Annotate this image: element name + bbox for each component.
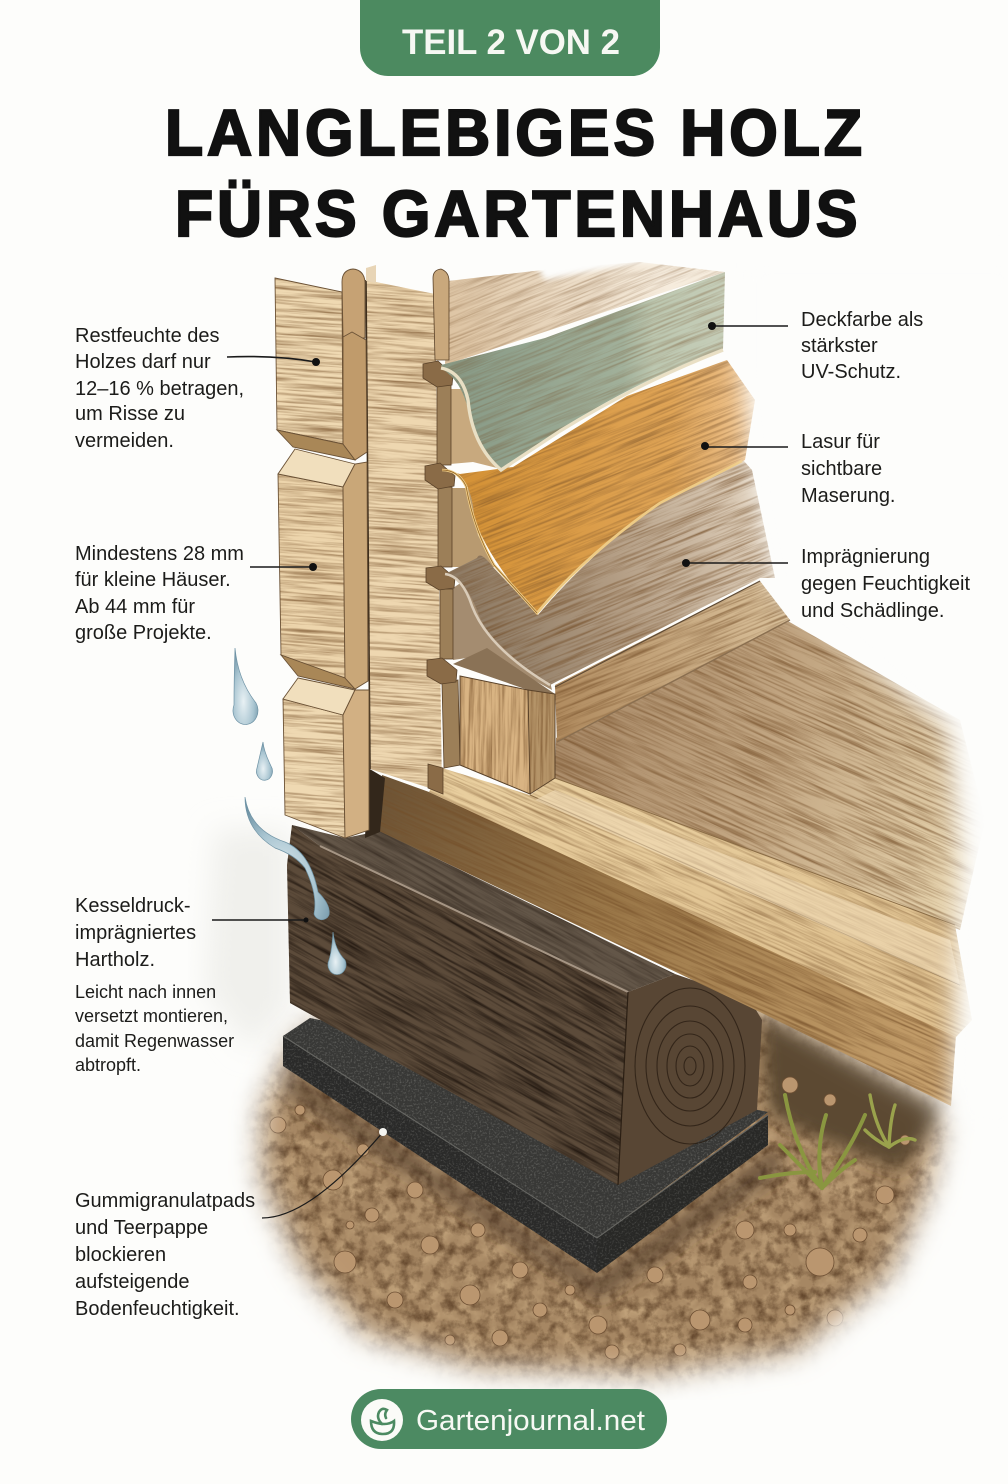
water drops and runoff xyxy=(233,648,346,975)
ground with soil and pebbles xyxy=(239,1010,960,1396)
callout: pressure-treated hardwood: abtropft. xyxy=(75,1055,141,1075)
title: FÜRS GARTENHAUS xyxy=(175,177,858,250)
lower brown rim beam xyxy=(379,775,956,1106)
callout: rubber granulate pads xyxy=(75,1128,387,1320)
callout: residual moisture xyxy=(75,325,320,452)
illustration: wall construction cross-section xyxy=(190,240,1008,1400)
callout: glaze: Lasur für xyxy=(801,431,880,453)
callout: rubber granulate pads: Gummigranulatpads xyxy=(75,1190,255,1212)
plant tufts xyxy=(760,1095,915,1188)
soft grey wash beside sleeper xyxy=(205,830,290,1050)
rubber granulate pad with roofing felt xyxy=(283,1018,768,1273)
callout: pressure-treated hardwood: damit Regenwasser xyxy=(75,1031,234,1051)
callout: impregnation: Imprägnierung xyxy=(801,546,930,568)
callout: top coat xyxy=(708,309,923,383)
callout: wall thickness: für kleine Häuser. xyxy=(75,569,231,591)
callout: pressure-treated hardwood: versetzt montieren, xyxy=(75,1006,228,1026)
footer logo pill: Gartenjournal.net xyxy=(416,1405,645,1437)
title xyxy=(165,96,862,250)
callout: pressure-treated hardwood xyxy=(75,895,308,1075)
log B xyxy=(278,449,368,689)
top fade of raw wall xyxy=(520,240,760,280)
callout: rubber granulate pads: und Teerpappe xyxy=(75,1217,208,1239)
callout: residual moisture: 12–16 % betragen, xyxy=(75,378,244,400)
wood stain plank: taupe impregnation xyxy=(445,460,775,685)
callout: residual moisture: Holzes darf nur xyxy=(75,351,211,373)
callout: pressure-treated hardwood: Hartholz. xyxy=(75,949,155,971)
callout: wall thickness xyxy=(75,543,317,644)
raw wall boards behind coatings xyxy=(445,262,725,690)
callout: impregnation: gegen Feuchtigkeit xyxy=(801,573,970,595)
wood stain plank: orange glaze xyxy=(442,360,755,615)
callout: wall thickness: Mindestens 28 mm xyxy=(75,543,244,565)
light oak sill board xyxy=(429,768,972,1037)
callout: rubber granulate pads: aufsteigende xyxy=(75,1271,190,1293)
callout: residual moisture: vermeiden. xyxy=(75,430,174,452)
callout: wall thickness: große Projekte. xyxy=(75,622,212,644)
callout: glaze xyxy=(701,431,896,507)
callout: glaze: sichtbare xyxy=(801,458,882,480)
callout: top coat: UV-Schutz. xyxy=(801,361,901,383)
floor boards xyxy=(555,620,985,930)
footer logo pill xyxy=(351,1389,667,1449)
central upright log face xyxy=(366,265,442,792)
title: LANGLEBIGES HOLZ xyxy=(165,96,862,169)
callout: rubber granulate pads: blockieren xyxy=(75,1244,166,1266)
callout: pressure-treated hardwood: Leicht nach innen xyxy=(75,982,216,1002)
fascia below taupe plank xyxy=(555,581,790,742)
callout: residual moisture: um Risse zu xyxy=(75,403,185,425)
left stacked logs xyxy=(275,269,369,838)
callout: pressure-treated hardwood: Kesseldruck- xyxy=(75,895,191,917)
log A xyxy=(275,269,367,460)
callout: top coat: stärkster xyxy=(801,335,878,357)
callout: top coat: Deckfarbe als xyxy=(801,309,923,331)
icon: sprout in bowl xyxy=(371,1409,394,1434)
wood paint plank: green top coat xyxy=(441,272,725,472)
callout: impregnation: und Schädlinge. xyxy=(801,600,944,622)
small block at wall joint xyxy=(453,648,555,794)
badge: part 2 of 2: TEIL 2 VON 2 xyxy=(402,23,620,62)
badge: part 2 of 2 xyxy=(360,0,660,76)
callout: impregnation xyxy=(682,546,970,622)
impregnated hardwood sleeper xyxy=(287,825,762,1185)
right tongue and groove profile xyxy=(423,269,460,794)
log C xyxy=(283,678,369,838)
callout: wall thickness: Ab 44 mm für xyxy=(75,596,195,618)
callout: pressure-treated hardwood: imprägniertes xyxy=(75,922,196,944)
dark gap below wall xyxy=(365,768,385,838)
right edge watercolour fade xyxy=(745,262,1008,1135)
callout: residual moisture: Restfeuchte des xyxy=(75,325,220,347)
callout: glaze: Maserung. xyxy=(801,485,896,507)
callout: rubber granulate pads: Bodenfeuchtigkeit. xyxy=(75,1298,240,1320)
